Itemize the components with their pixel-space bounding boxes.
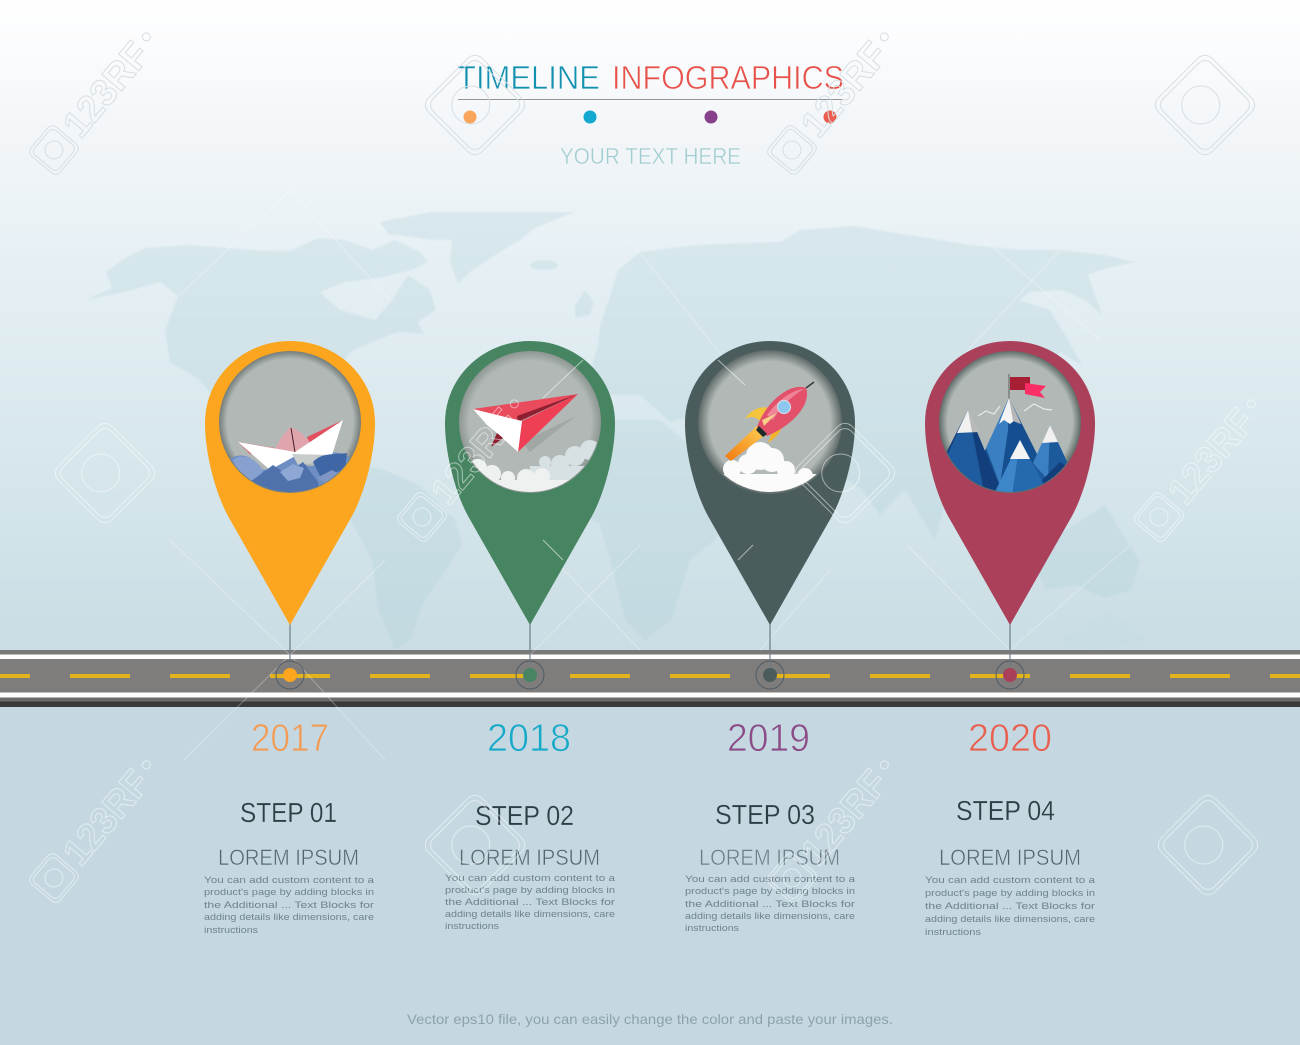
year 2020: 2020 <box>968 717 1052 760</box>
step 03 subheading: LOREM IPSUM <box>699 845 840 870</box>
title <box>457 59 844 96</box>
step 01 description <box>204 875 375 936</box>
pin 4: mountains and flag <box>925 341 1095 689</box>
step 01 description: adding details like dimensions, care <box>204 912 374 923</box>
year 2018: 2018 <box>487 717 571 760</box>
title: TIMELINE <box>457 59 600 96</box>
watermark logos, lower rows <box>27 390 1273 907</box>
step 01 heading: STEP 01 <box>240 797 337 828</box>
road <box>0 650 1300 707</box>
title: INFOGRAPHICS <box>612 59 844 96</box>
watermark logos, upper row: 123RF <box>56 34 158 146</box>
icon: mountains with flag <box>945 374 1070 496</box>
step 02 description: the Additional ... Text Blocks for <box>445 897 615 908</box>
watermark logos, upper row <box>27 23 1259 179</box>
step 03 description <box>685 874 856 934</box>
watermark logos, lower rows: 123RF <box>56 762 158 874</box>
step 03 description: instructions <box>685 923 739 934</box>
step 03 description: You can add custom content to a <box>685 874 856 885</box>
step 01 description: product's page by adding blocks in <box>204 887 374 898</box>
step 02 description: product's page by adding blocks in <box>445 885 615 896</box>
icon: paper boat on waves <box>230 420 350 492</box>
watermark logos, lower rows: 123RF <box>424 401 526 513</box>
step 01 description: instructions <box>204 925 258 936</box>
step 02 description: instructions <box>445 921 499 932</box>
step 04 description: product's page by adding blocks in <box>925 888 1095 899</box>
year 2017: 2017 <box>251 717 329 760</box>
step 02 description: adding details like dimensions, care <box>445 909 615 920</box>
watermark logos, lower rows: 123RF <box>794 762 896 874</box>
faint watermark cross lines <box>170 190 1130 760</box>
watermark logos, lower rows: 123RF <box>1161 401 1263 513</box>
watermark logos, upper row: 123RF <box>794 34 896 146</box>
step 01 description: the Additional ... Text Blocks for <box>204 900 374 911</box>
world map <box>85 212 1145 650</box>
title divider and dots <box>458 100 842 124</box>
icon: rocket with cloud <box>723 382 817 492</box>
short watermark streaks over pins <box>543 360 753 560</box>
step 01 description: You can add custom content to a <box>204 875 375 886</box>
pin 1: paper boat <box>205 341 375 689</box>
step 01 subheading: LOREM IPSUM <box>218 845 359 870</box>
pin 2: paper plane <box>445 341 615 689</box>
step 04 description: instructions <box>925 927 981 938</box>
step 02 heading: STEP 02 <box>475 800 574 831</box>
panel: step 2 <box>445 717 616 932</box>
step 04 heading: STEP 04 <box>956 795 1055 826</box>
year 2019: 2019 <box>727 717 810 760</box>
step 03 description: product's page by adding blocks in <box>685 886 855 897</box>
icon: paper plane over clouds <box>472 394 597 492</box>
footer note: Vector eps10 file, you can easily change the color and paste your images. <box>407 1011 893 1027</box>
step 04 description <box>925 875 1096 938</box>
step 03 description: adding details like dimensions, care <box>685 911 855 922</box>
step 02 description <box>445 873 616 932</box>
step 04 description: adding details like dimensions, care <box>925 914 1095 925</box>
step 04 description: the Additional ... Text Blocks for <box>925 901 1095 912</box>
step 04 subheading: LOREM IPSUM <box>939 845 1081 870</box>
panel: step 4 <box>925 717 1096 938</box>
step 03 description: the Additional ... Text Blocks for <box>685 899 855 910</box>
step 03 heading: STEP 03 <box>715 799 815 830</box>
panel: step 1 <box>204 717 375 936</box>
subtitle: YOUR TEXT HERE <box>560 143 741 169</box>
step 04 description: You can add custom content to a <box>925 875 1096 886</box>
panel: step 3 <box>685 717 856 934</box>
step 02 subheading: LOREM IPSUM <box>459 845 600 870</box>
pin 3: rocket <box>685 341 855 689</box>
step 02 description: You can add custom content to a <box>445 873 616 884</box>
